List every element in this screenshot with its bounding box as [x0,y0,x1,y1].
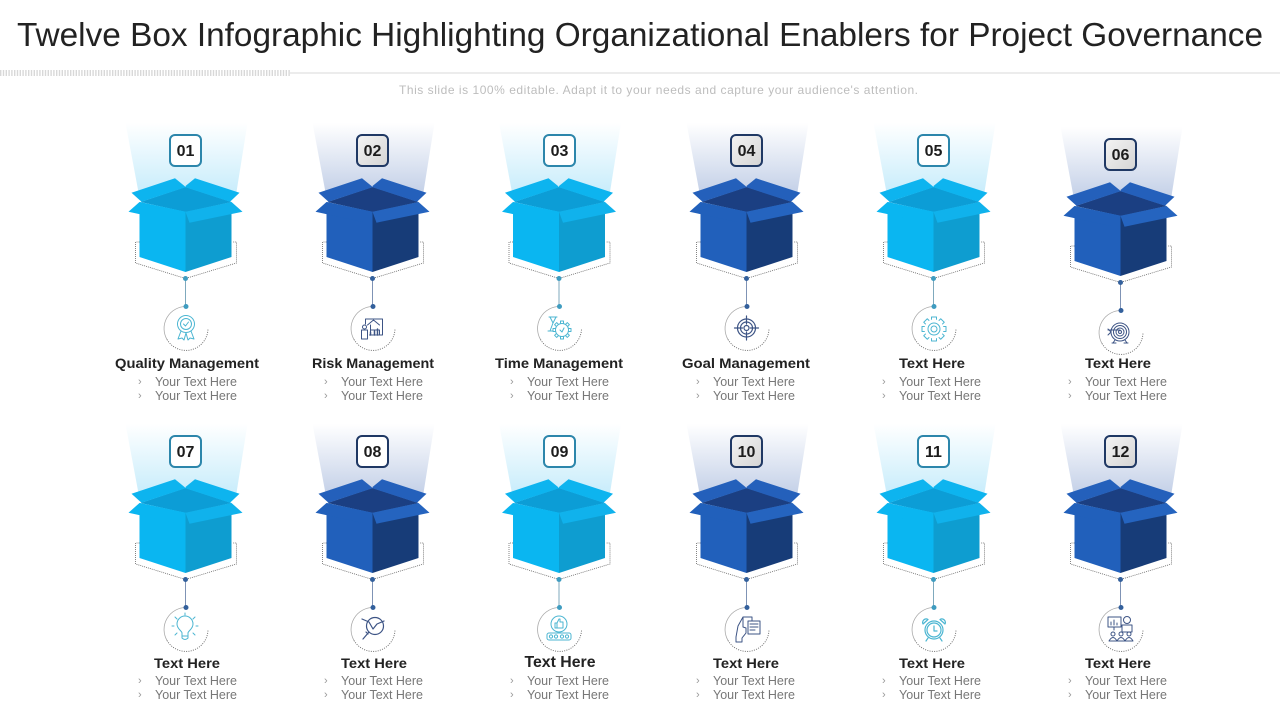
bullets 01 [138,374,237,403]
box 07 [126,424,248,573]
bullets 10 [696,673,795,702]
badge 06 [1105,139,1136,170]
panel: 02 Risk Management [312,123,434,403]
bullets 04: Your Text Here [713,374,795,389]
connector 12 [1070,543,1172,651]
heading 09: Text Here [524,654,596,671]
bullets 08: › [324,675,328,687]
box 01 [126,123,248,272]
connector 01 [136,242,236,350]
badge 05 [918,135,949,166]
icon: presentation audience [1108,616,1133,641]
bullets 08 [324,673,423,702]
bullets 04: Your Text Here [713,388,795,403]
connector 05 [884,242,984,350]
bullets 09: › [510,675,514,687]
bullets 07: Your Text Here [155,673,237,688]
bullets 11: › [882,675,886,687]
connector 07 [136,543,236,651]
badge 08 [357,436,388,467]
bullets 05: Your Text Here [899,374,981,389]
box 05 [874,123,996,272]
badge 04 [731,135,762,166]
heading 11: Text Here [899,655,965,671]
badge 07: 07 [177,444,194,461]
badge 01 [170,135,201,166]
bullets 10: › [696,675,700,687]
panel: 10 Text Here [686,424,808,702]
header rule [0,70,1280,76]
bullets 02: › [324,376,328,388]
title: Twelve Box Infographic Highlighting Organizational Enablers for Project Governance [17,16,1263,53]
bullets 07 [138,673,237,702]
bullets 03: › [510,390,514,402]
icon: magnifier with chart [362,618,384,639]
badge 09: 09 [551,444,568,461]
panel: 03 Time Management [495,123,623,403]
bullets 04: › [696,376,700,388]
bullets 09: Your Text Here [527,687,609,702]
badge 01: 01 [177,143,194,160]
icon: archery target [1108,323,1129,343]
bullets 10: Your Text Here [713,687,795,702]
box 10 [686,424,808,573]
bullets 07: Your Text Here [155,687,237,702]
box 12 [1060,424,1182,573]
box 06 [1060,127,1182,276]
badge 11 [918,436,949,467]
heading 01: Quality Management [115,355,259,371]
icon: gear [922,317,946,341]
bullets 02: › [324,390,328,402]
bullets 11: › [882,689,886,701]
heading 06: Text Here [1085,355,1151,371]
bullets 02: Your Text Here [341,388,423,403]
bullets 03: › [510,376,514,388]
bullets 12: Your Text Here [1085,673,1167,688]
icon: rosette [178,316,194,340]
bullets 03: Your Text Here [527,374,609,389]
subtitle: This slide is 100% editable. Adapt it to your needs and capture your audience's attention. [399,83,918,97]
bullets 05: › [882,390,886,402]
icon: thumbs up rating [547,616,571,640]
badge 09 [544,436,575,467]
connector 11 [884,543,984,651]
heading 05: Text Here [899,355,965,371]
bullets 11: Your Text Here [899,687,981,702]
bullets 12: Your Text Here [1085,687,1167,702]
bullets 12 [1068,673,1167,702]
bullets 12: › [1068,675,1072,687]
box 04 [686,123,808,272]
box 09 [499,424,621,573]
bullets 03 [510,374,609,403]
badge 05: 05 [925,143,942,160]
badge 02 [357,135,388,166]
badge 04: 04 [738,143,756,160]
connector 04 [696,242,798,350]
bullets 06: › [1068,390,1072,402]
connector 03 [509,242,610,350]
panel: 11 Text Here [874,424,996,702]
badge 07 [170,436,201,467]
bullets 05: › [882,376,886,388]
badge 12: 12 [1112,444,1130,461]
badge 08: 08 [364,444,382,461]
panel: 06 Text Here [1060,127,1182,403]
bullets 01: › [138,390,142,402]
bullets 10: Your Text Here [713,673,795,688]
panel: 08 Text Here [312,424,434,702]
icon: hand holding phone [736,617,760,642]
icon: alarm clock [923,619,945,641]
box 11 [874,424,996,573]
badge 06: 06 [1112,147,1130,164]
bullets 01: Your Text Here [155,388,237,403]
bullets 11 [882,673,981,702]
heading 04: Goal Management [682,355,810,371]
badge 10: 10 [738,444,756,461]
bullets 05: Your Text Here [899,388,981,403]
bullets 06: Your Text Here [1085,374,1167,389]
connector 10 [696,543,798,651]
panel: 01 Quality Management [115,123,259,403]
icon: risk chart [362,319,382,339]
bullets 01: › [138,376,142,388]
bullets 07: › [138,689,142,701]
box 02 [312,123,434,272]
bullets 03: Your Text Here [527,388,609,403]
panel: 04 Goal Management [682,123,810,403]
bullets 09: › [510,689,514,701]
heading 08: Text Here [341,655,407,671]
connector 06 [1070,246,1172,354]
box 03 [499,123,621,272]
icon: light bulb [172,613,198,640]
bullets 12: › [1068,689,1072,701]
connector 09 [509,543,610,651]
icon: hourglass and gear [548,317,571,339]
heading 03: Time Management [495,355,623,371]
bullets 11: Your Text Here [899,673,981,688]
badge 03: 03 [551,143,568,160]
connector 02 [322,242,424,350]
bullets 09: Your Text Here [527,673,609,688]
bullets 06: Your Text Here [1085,388,1167,403]
badge 03 [544,135,575,166]
bullets 08: Your Text Here [341,687,423,702]
connector 08 [322,543,424,651]
badge 02: 02 [364,143,382,160]
badge 12 [1105,436,1136,467]
bullets 05 [882,374,981,403]
bullets 10: › [696,689,700,701]
panel: 07 Text Here [126,424,248,702]
bullets 06 [1068,374,1167,403]
bullets 02: Your Text Here [341,374,423,389]
heading 07: Text Here [154,655,220,671]
panel: 09 Text Here [499,424,621,702]
bullets 02 [324,374,423,403]
heading 12: Text Here [1085,655,1151,671]
badge 10 [731,436,762,467]
panel: 12 Text Here [1060,424,1182,702]
bullets 07: › [138,675,142,687]
box 08 [312,424,434,573]
bullets 04: › [696,390,700,402]
heading 02: Risk Management [312,355,434,371]
bullets 06: › [1068,376,1072,388]
icon: crosshair target [734,316,758,340]
bullets 08: › [324,689,328,701]
bullets 08: Your Text Here [341,673,423,688]
bullets 01: Your Text Here [155,374,237,389]
panel: 05 Text Here [874,123,996,403]
heading 10: Text Here [713,655,779,671]
badge 11: 11 [925,444,942,461]
bullets 04 [696,374,795,403]
bullets 09 [510,673,609,702]
